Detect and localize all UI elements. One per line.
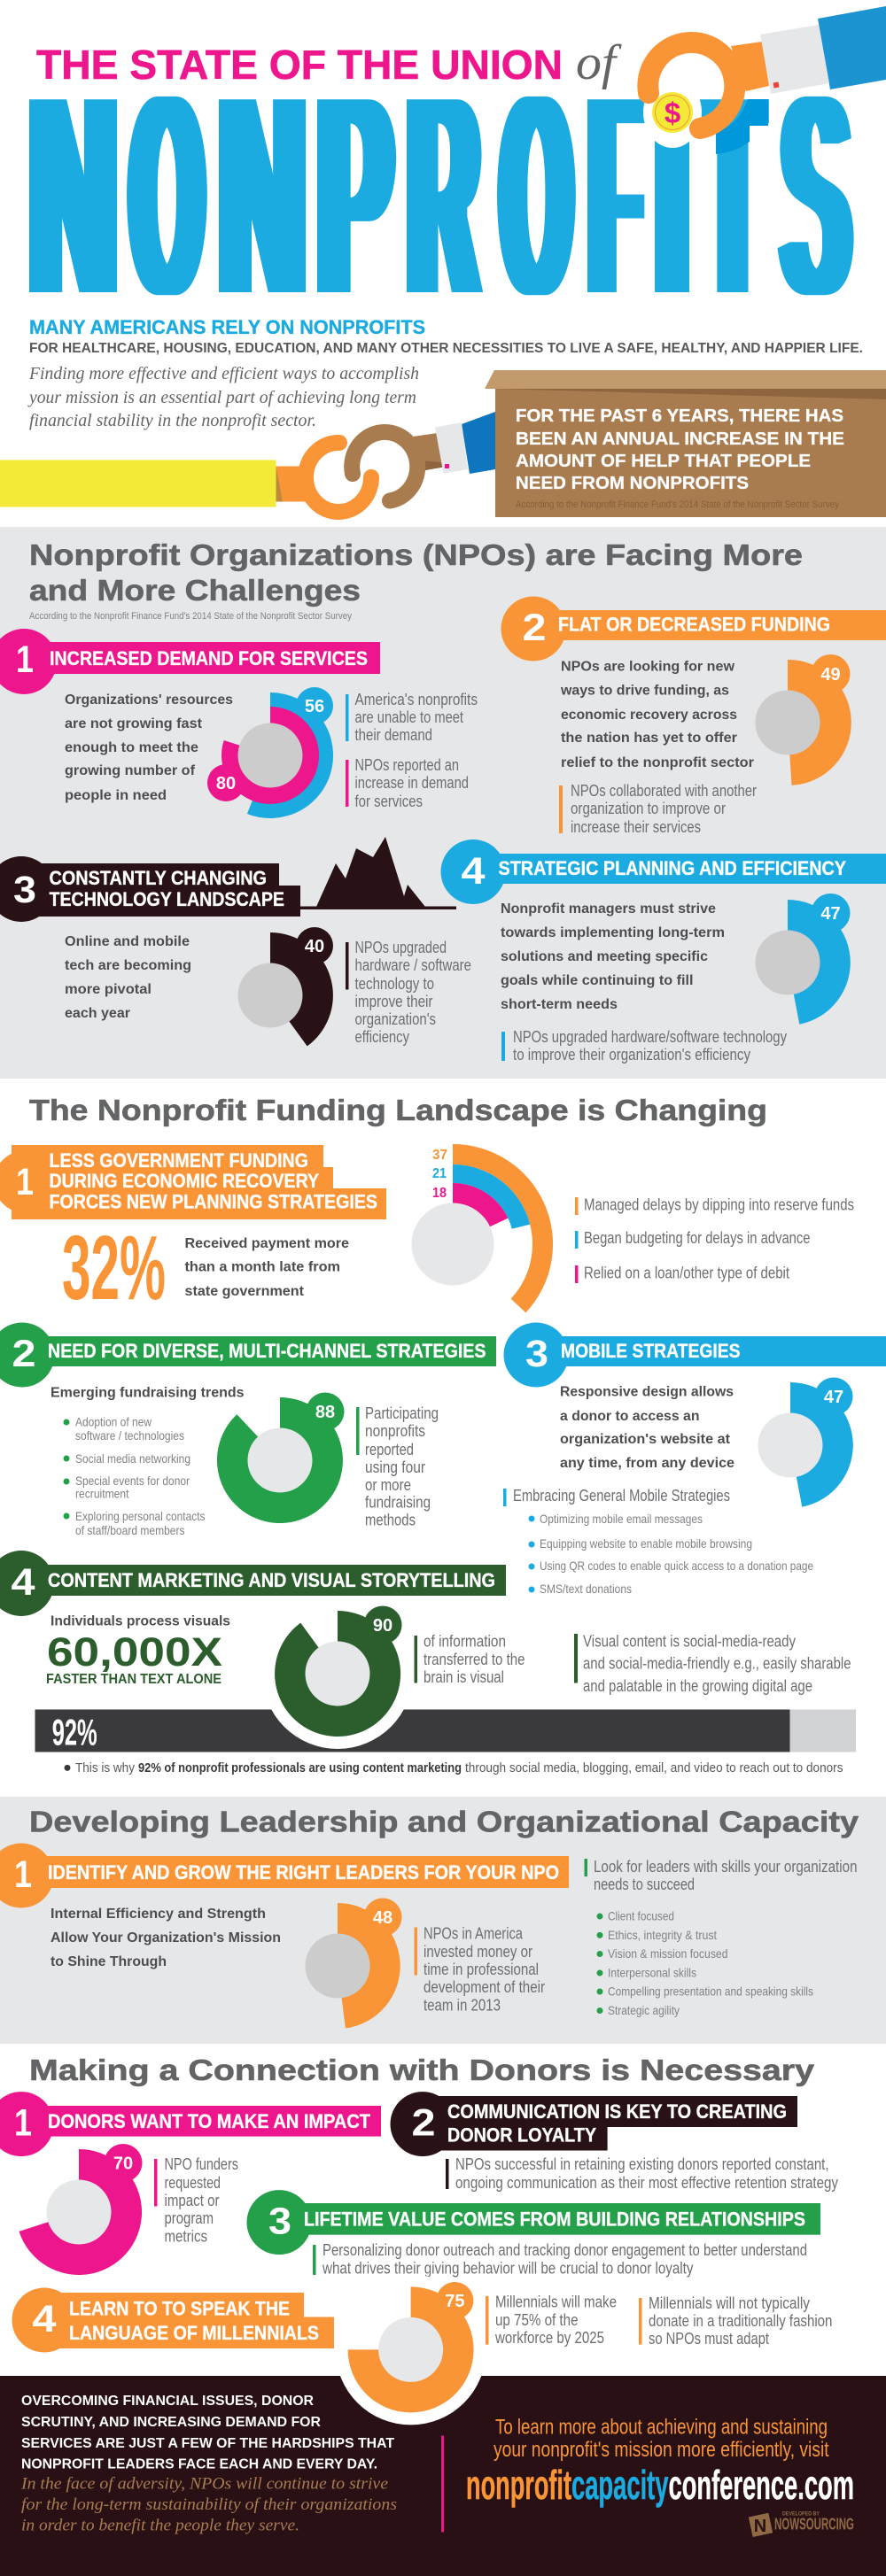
intro paragraph: financial stability in the nonprofit sector. [29, 411, 316, 430]
legend: millennials adapt: Millennials will not typically [649, 2294, 810, 2312]
panel: footer [20, 2394, 854, 2537]
item 3 text [313, 2241, 807, 2278]
item 1 text: enough to meet the [65, 740, 198, 755]
legend: millennials adapt: so NPOs must adapt [649, 2330, 769, 2348]
legend: 75: Millennials will make [495, 2294, 617, 2311]
stat: 60,000x: Individuals process visuals [51, 1613, 230, 1629]
legend: 70 [154, 2155, 238, 2246]
heading: The Nonprofit Funding Landscape is Changing [29, 1095, 767, 1127]
chart: 90 donut [262, 1598, 413, 1749]
item 3 text: Online and mobile [65, 934, 190, 949]
leader skills list: Compelling presentation and speaking skills [608, 1984, 813, 1998]
closing italic text: in order to benefit the people they serve. [21, 2517, 299, 2535]
closing statement: SERVICES ARE JUST A FEW OF THE HARDSHIPS THAT [21, 2436, 395, 2451]
item 1 banner: 1 [16, 638, 34, 681]
chart: 75 donut [336, 2274, 486, 2425]
item 1 text: Internal Efficiency and Strength [51, 1907, 266, 1922]
item 4 text: towards implementing long-term [501, 925, 725, 940]
bullet list: trends: Exploring personal contacts [75, 1509, 206, 1523]
item 2 banner [390, 2092, 797, 2156]
item 2 banner [0, 1323, 496, 1387]
legend: 88: using four [365, 1458, 425, 1476]
item 2 text: ways to drive funding, as [560, 684, 729, 698]
item 3 text: a donor to access an [560, 1409, 700, 1424]
item 2 banner: FLAT OR DECREASED FUNDING [558, 613, 830, 636]
title line: the state of the union of: THE STATE OF THE UNION [36, 42, 563, 88]
chart: 56 and 80 donut: 56 [305, 697, 324, 716]
bullet list: trends: Social media networking [75, 1451, 190, 1466]
legend: 90: transferred to the [424, 1651, 525, 1668]
legend: 88: fundraising [365, 1493, 431, 1511]
item 4 banner: CONTENT MARKETING AND VISUAL STORYTELLING [48, 1569, 495, 1591]
item 4 banner [441, 839, 886, 904]
bullet: 92% of nonprofit professionals: 92% of nonprofit professionals are using content marketing [138, 1760, 462, 1775]
closing italic text: for the long-term sustainability of their organizations [21, 2495, 397, 2514]
panel: challenges [0, 539, 886, 1064]
callout: annual increase: BEEN AN ANNUAL INCREASE IN THE [516, 429, 844, 449]
item 1 text: Organizations' resources [65, 692, 233, 708]
heading: and More Challenges [29, 575, 361, 607]
legend: 75: workforce by 2025 [494, 2329, 604, 2347]
mobile strategies list: Embracing General Mobile Strategies [513, 1487, 730, 1505]
item 2 banner: 2 [12, 1333, 35, 1375]
leader skills list: Vision & mission focused [608, 1946, 728, 1961]
title: nonprofits: N [30, 32, 116, 360]
item 3 text: Responsive design allows [560, 1385, 734, 1399]
item 4 text: solutions and meeting specific [501, 949, 708, 964]
chart: 48 donut [305, 1899, 402, 2028]
legend: 88: Participating [365, 1404, 439, 1422]
icon: linked hands [0, 412, 495, 512]
panel: donors [0, 2054, 838, 2425]
item 1 banner: 1 [14, 1853, 32, 1896]
panel: footer background [0, 2376, 886, 2576]
legend: 49: increase their services [571, 818, 701, 836]
stat text [184, 1236, 349, 1299]
item 1 banner: FORCES NEW PLANNING STRATEGIES [50, 1190, 377, 1213]
item 3 text: what drives their giving behavior will be crucial to donor loyalty [322, 2260, 693, 2278]
item 1 banner: DURING ECONOMIC RECOVERY [50, 1170, 319, 1192]
item 2 text: Emerging fundraising trends [51, 1385, 245, 1401]
item 4 banner [0, 1551, 506, 1616]
legend: 88: methods [365, 1511, 416, 1528]
legend: 80: increase in demand [354, 774, 469, 792]
mobile strategies list [503, 1487, 813, 1596]
stat text: Received payment more [184, 1236, 349, 1251]
item 2 text: the nation has yet to offer [561, 731, 737, 746]
item 1 banner: DONORS WANT TO MAKE AN IMPACT [48, 2110, 371, 2132]
title: nonprofits: R [409, 32, 478, 360]
mobile strategies list: Using QR codes to enable quick access to a donation page [540, 1559, 813, 1573]
item 3 banner: 3 [268, 2200, 291, 2242]
title: nonprofits: O [132, 32, 202, 360]
legend: 70: impact or [165, 2192, 220, 2209]
item 2 text: economic recovery across [561, 708, 737, 723]
legend: 75: up 75% of the [495, 2311, 578, 2329]
intro paragraph: your mission is an essential part of achieving long term [27, 388, 416, 407]
item 2 text: NPOs are looking for new [561, 659, 735, 675]
chart: 70 donut [19, 2144, 142, 2275]
bullet: 92% of nonprofit professionals [64, 1760, 843, 1775]
chart: 88 donut: 88 [315, 1403, 335, 1422]
intro paragraph: Finding more effective and efficient ways to accomplish [28, 364, 419, 383]
chart: 56 and 80 donut [207, 687, 333, 818]
leader skills list: needs to succeed [594, 1876, 695, 1893]
item 3 banner: LIFETIME VALUE COMES FROM BUILDING RELATIONSHIPS [304, 2209, 805, 2231]
title: nonprofits: P [319, 32, 392, 360]
legend: 49: organization to improve or [571, 800, 726, 817]
stat: 60,000x [46, 1613, 230, 1687]
item 3 text [560, 1385, 734, 1471]
item 3 banner [0, 856, 300, 922]
chart: 90 donut: 90 [373, 1616, 392, 1636]
chart: radial bars 37, 21, 18: 18 [432, 1186, 447, 1201]
legend: millennials adapt [639, 2294, 832, 2348]
leader skills list [585, 1858, 858, 2017]
callout: annual increase: FOR THE PAST 6 YEARS, THERE HAS [516, 406, 843, 426]
legend: 47: to improve their organization's efficiency [513, 1046, 750, 1064]
website url [466, 2462, 854, 2508]
subheading: MANY AMERICANS RELY ON NONPROFITS [29, 316, 425, 338]
legend: 75 [486, 2294, 617, 2347]
title: nonprofits [30, 32, 849, 360]
subheading line: FOR HEALTHCARE, HOUSING, EDUCATION, AND MANY OTHER NECESSITIES TO LIVE A SAFE, HEALTHY, AND HAPPIER LIFE. [29, 341, 863, 356]
legend: 40: improve their [354, 993, 432, 1010]
title: nonprofits: O [502, 32, 571, 360]
leader skills list: Ethics, integrity & trust [608, 1928, 717, 1942]
legend: 80 [346, 756, 469, 810]
legend: 56: their demand [354, 726, 432, 744]
legend: visual content: Visual content is social-media-ready [583, 1633, 796, 1651]
item 2 banner: 2 [523, 607, 546, 649]
chart: 49 donut: 49 [820, 665, 841, 685]
callout: annual increase: NEED FROM NONPROFITS [516, 473, 749, 493]
legend: 88: nonprofits [365, 1422, 425, 1440]
item 4 text: Nonprofit managers must strive [501, 901, 716, 917]
chart: 88 donut [217, 1392, 344, 1523]
legend: 49: NPOs collaborated with another [571, 782, 757, 800]
item 4 banner: LANGUAGE OF MILLENNIALS [69, 2322, 319, 2344]
item 3 text: tech are becoming [65, 958, 191, 973]
item 3 text: each year [65, 1006, 130, 1021]
item 2 banner: 2 [411, 2102, 436, 2145]
legend: 49 [559, 782, 757, 836]
legend: radial bars: Began budgeting for delays in advance [584, 1229, 810, 1247]
closing statement: SCRUTINY, AND INCREASING DEMAND FOR [21, 2415, 321, 2430]
item 1 banner [0, 1145, 386, 1219]
item 3 text: more pivotal [65, 982, 152, 997]
progress bar: 92% [35, 1709, 856, 1753]
item 2 text [446, 2155, 838, 2192]
item 3 banner: 3 [525, 1333, 548, 1375]
stat: 32%: 32% [62, 1217, 166, 1319]
website url: capacity [571, 2462, 669, 2508]
legend: 80: NPOs reported an [354, 756, 459, 774]
item 2 text: relief to the nonprofit sector [561, 755, 754, 770]
legend: 40: hardware / software [354, 956, 471, 974]
item 3 banner: CONSTANTLY CHANGING [50, 867, 267, 889]
legend: 47: NPOs upgraded hardware/software technology [513, 1028, 787, 1046]
item 4 banner: STRATEGIC PLANNING AND EFFICIENCY [498, 857, 846, 879]
legend: 56: are unable to meet [354, 708, 463, 726]
item 3 text: any time, from any device [560, 1456, 734, 1471]
legend: 56: America's nonprofits [354, 691, 478, 708]
legend: 48: time in professional [424, 1961, 539, 1978]
legend: millennials adapt: donate in a traditionally fashion [649, 2312, 832, 2330]
legend: 70: program [165, 2209, 214, 2227]
panel: funding landscape [0, 1095, 886, 1775]
mobile strategies list: SMS/text donations [540, 1582, 632, 1596]
chart: radial bars 37, 21, 18: 37 [432, 1148, 447, 1163]
leader skills list: Interpersonal skills [608, 1965, 696, 1979]
item 1 text: are not growing fast [65, 716, 203, 731]
bullet list: trends: Adoption of new [75, 1415, 152, 1429]
icon: hand holding coin: $ [664, 97, 680, 129]
legend: radial bars: Relied on a loan/other type of debit [584, 1265, 789, 1282]
item 1 banner: 1 [14, 2102, 32, 2145]
item 1 banner: IDENTIFY AND GROW THE RIGHT LEADERS FOR YOUR NPO [48, 1861, 559, 1884]
item 1 text [65, 692, 233, 803]
legend: 88: or more [365, 1476, 411, 1494]
item 2 text [560, 659, 754, 770]
item 2 banner: DONOR LOYALTY [447, 2123, 596, 2147]
legend: visual content: and palatable in the growing digital age [583, 1677, 812, 1695]
item 4 text [501, 901, 725, 1012]
title: nonprofits: I [656, 32, 688, 360]
item 3 text: organization's website at [560, 1432, 731, 1447]
icon: box [485, 370, 886, 517]
item 4 text: goals while continuing to fill [501, 973, 693, 988]
item 4 banner: 4 [32, 2298, 57, 2340]
title: nonprofits: F [591, 32, 640, 360]
legend: 56 [346, 691, 478, 744]
legend: visual content [574, 1633, 851, 1695]
item 2 banner: NEED FOR DIVERSE, MULTI-CHANNEL STRATEGIES [48, 1340, 486, 1362]
stat: 60,000x: FASTER THAN TEXT ALONE [46, 1672, 222, 1687]
bullet: 92% of nonprofit professionals: This is why [75, 1760, 135, 1775]
chart: 40 donut: 40 [305, 937, 324, 956]
item 3 banner [503, 1323, 886, 1387]
item 1 banner: INCREASED DEMAND FOR SERVICES [50, 647, 368, 669]
stat: 60,000x: 60,000X [47, 1629, 222, 1675]
item 2 banner [501, 597, 886, 661]
heading: Developing Leadership and Organizational Capacity [29, 1806, 859, 1838]
mobile strategies list: Equipping website to enable mobile browsing [540, 1536, 752, 1551]
item 3 banner: TECHNOLOGY LANDSCAPE [50, 888, 284, 910]
title: nonprofits: T [704, 32, 761, 360]
title line: the state of the union of: of [576, 35, 623, 90]
chart: radial bars 37, 21, 18: 21 [432, 1166, 447, 1181]
chart: 49 donut [755, 654, 851, 785]
source note: According to the Nonprofit Finance Fund's 2014 State of the Nonprofit Sector Survey [29, 611, 352, 622]
item 1 text: growing number of [65, 763, 196, 778]
legend: 80: for services [354, 793, 423, 810]
legend: 48: invested money or [424, 1943, 532, 1961]
closing italic text [20, 2475, 397, 2535]
item 3 banner: MOBILE STRATEGIES [561, 1340, 741, 1362]
leader skills list: Strategic agility [608, 2003, 680, 2017]
legend: 90: brain is visual [424, 1668, 504, 1686]
legend: 48: NPOs in America [424, 1925, 524, 1943]
legend: 88: reported [365, 1441, 414, 1458]
item 1 banner [0, 629, 380, 694]
item 1 text: people in need [65, 788, 167, 803]
progress bar: 92%: 92% [52, 1711, 97, 1753]
legend: 40: organization's [354, 1010, 436, 1028]
item 4 banner: 4 [461, 850, 486, 893]
bullet: 92% of nonprofit professionals: through social media, blogging, email, and video to reach out to donors [465, 1760, 843, 1775]
item 1 banner [0, 2092, 381, 2156]
legend: 48 [415, 1925, 545, 2014]
item 4 text: short-term needs [501, 997, 618, 1012]
logo: nowsourcing: DEVELOPED BY [782, 2512, 820, 2518]
item 4 banner: 4 [11, 1561, 35, 1604]
mobile strategies list: Optimizing mobile email messages [540, 1512, 703, 1526]
legend: 47 [501, 1028, 787, 1064]
item 4 banner: LEARN TO TO SPEAK THE [69, 2298, 290, 2320]
chart: 40 donut [237, 927, 333, 1046]
icon: hand holding coin [643, 6, 886, 154]
closing statement: OVERCOMING FINANCIAL ISSUES, DONOR [21, 2394, 314, 2409]
chart: 48 donut: 48 [373, 1908, 392, 1928]
legend: 40: technology to [354, 975, 434, 993]
source note: According to the Nonprofit Finance Fund's 2014 State of the Nonprofit Sector Survey [516, 499, 839, 510]
item 3 banner: 3 [13, 869, 36, 911]
legend: 70: NPO funders [165, 2155, 238, 2173]
legend: 40: efficiency [354, 1028, 409, 1046]
stat text: than a month late from [184, 1259, 340, 1275]
item 2 banner: COMMUNICATION IS KEY TO CREATING [447, 2100, 787, 2123]
legend: 48: development of their [424, 1978, 545, 1996]
item 3 text [65, 934, 191, 1021]
heading [29, 539, 803, 607]
chart: 47 donut mobile [758, 1378, 853, 1507]
chart: 47 donut [755, 893, 851, 1025]
item 3 banner [246, 2190, 820, 2255]
closing statement: NONPROFIT LEADERS FACE EACH AND EVERY DAY. [21, 2456, 377, 2472]
bullet list: trends: recruitment [75, 1487, 129, 1501]
item 1 text: to Shine Through [51, 1954, 167, 1969]
item 1 banner [0, 1844, 569, 1907]
website url: nonprofit [466, 2462, 571, 2508]
logo: nowsourcing [749, 2512, 854, 2537]
bullet list: trends [64, 1415, 206, 1537]
legend: 90 [415, 1633, 525, 1686]
leader skills list: Client focused [608, 1908, 674, 1922]
chart: 47 donut mobile: 47 [824, 1388, 843, 1407]
bullet list: trends: Special events for donor [75, 1474, 190, 1488]
item 1 text: Allow Your Organization's Mission [51, 1930, 281, 1946]
item 1 text [51, 1907, 281, 1969]
chart: 70 donut: 70 [113, 2154, 133, 2173]
legend: radial bars [575, 1195, 854, 1283]
callout: annual increase [516, 406, 844, 493]
icon: mountain line chart [300, 837, 456, 909]
legend: 48: team in 2013 [424, 1996, 501, 2014]
bullet list: trends: of staff/board members [75, 1523, 184, 1537]
closing italic text: In the face of adversity, NPOs will continue to strive [20, 2475, 388, 2494]
chart: 75 donut: 75 [445, 2292, 465, 2311]
legend: 70: requested [165, 2174, 221, 2192]
legend: 70: metrics [165, 2228, 207, 2246]
closing statement [21, 2394, 395, 2472]
item 4 banner [12, 2288, 334, 2352]
callout: annual increase: AMOUNT OF HELP THAT PEOPLE [516, 451, 811, 471]
chart: 56 and 80 donut: 80 [216, 774, 236, 793]
panel: leadership [0, 1806, 859, 2028]
panel: header [0, 6, 886, 517]
bullet list: trends: software / technologies [75, 1428, 184, 1443]
stat text: state government [184, 1284, 305, 1299]
logo: nowsourcing: N [754, 2517, 766, 2536]
legend: 88 [356, 1404, 439, 1528]
heading: Nonprofit Organizations (NPOs) are Facing More [29, 539, 803, 572]
legend: 40: NPOs upgraded [354, 939, 447, 956]
call to action [494, 2416, 829, 2462]
chart: 47 donut: 47 [820, 904, 841, 924]
legend: 40 [346, 939, 471, 1046]
item 1 banner: 1 [16, 1161, 34, 1203]
title: nonprofits: N [220, 32, 305, 360]
chart: radial bars 37, 21, 18 [411, 1144, 553, 1312]
item 1 banner: LESS GOVERNMENT FUNDING [50, 1149, 308, 1172]
heading: Making a Connection with Donors is Necessary [29, 2054, 814, 2087]
legend: 90: of information [424, 1633, 506, 1651]
intro paragraph [27, 364, 419, 430]
